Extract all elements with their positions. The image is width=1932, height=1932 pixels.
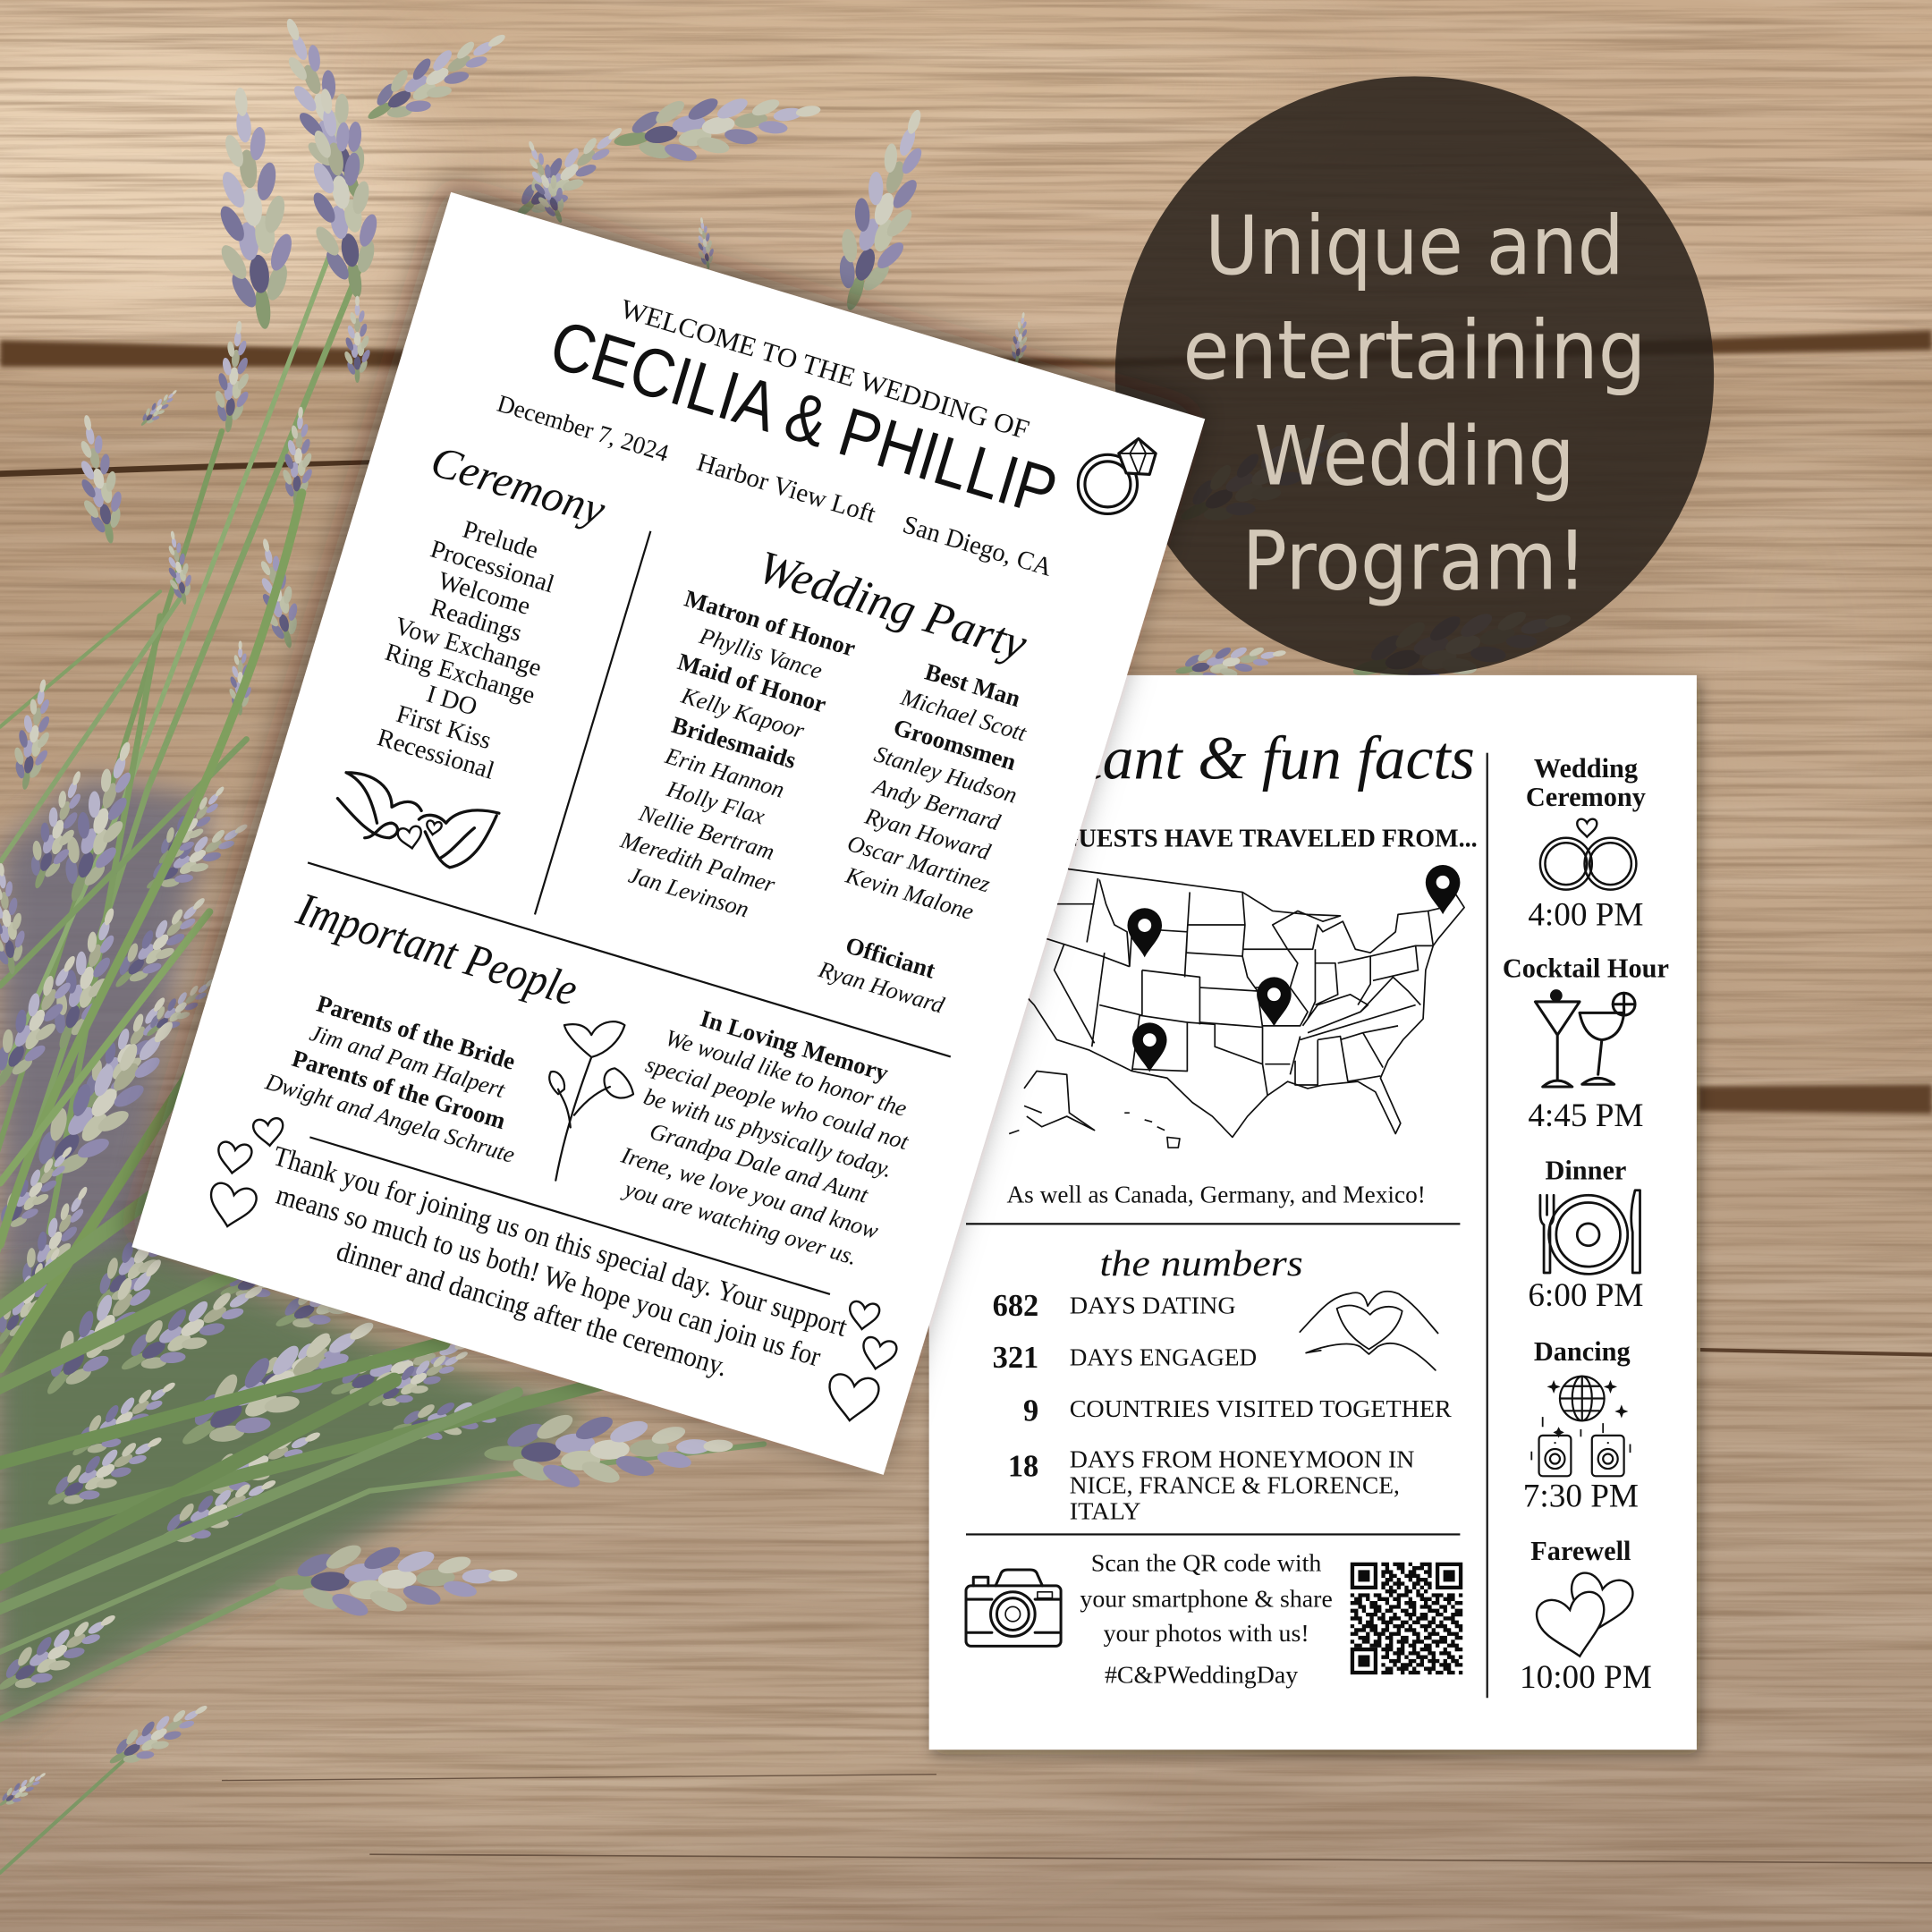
text: QR code instructions: your smartphone & share: [1080, 1584, 1333, 1612]
stats list: 9: [1023, 1394, 1038, 1428]
ceremony order list: First Kiss: [393, 700, 495, 755]
groom party list: Officiant: [843, 931, 938, 984]
groom party list: Andy Bernard: [869, 773, 1004, 836]
bridal party list: Kelly Kapoor: [678, 682, 808, 744]
stats list: DAYS DATING: [1070, 1291, 1236, 1318]
parents list: [262, 982, 544, 1168]
groom party list: [807, 651, 1047, 1021]
in loving memory: We would like to honor the: [663, 1024, 911, 1122]
text: QR code instructions: your photos with us!: [1104, 1619, 1309, 1647]
parents list: Jim and Pam Halpert: [307, 1020, 508, 1103]
schedule: wedding ceremony: 4:00 PM: [1528, 897, 1643, 934]
bridal party list: Maid of Honor: [674, 648, 829, 718]
ceremony order list: Processional: [428, 535, 557, 598]
lavender bundle: [0, 7, 1580, 1873]
event details: [495, 388, 1055, 582]
ceremony order list: Welcome: [435, 567, 533, 621]
panel: fun facts card: [929, 675, 1697, 1750]
icon: heart hands: [1300, 1292, 1438, 1370]
thank you message: means so much to us both! We hope you can join us for: [273, 1179, 825, 1373]
stats list: DAYS ENGAGED: [1070, 1343, 1257, 1370]
icon: hearts left: [205, 1118, 284, 1231]
stats list: NICE, FRANCE & FLORENCE,: [1070, 1471, 1400, 1499]
schedule: farewell: [1520, 1536, 1652, 1696]
in loving memory: special people who could not: [642, 1051, 912, 1155]
heading: important people: Important People: [291, 883, 583, 1016]
stats list: ITALY: [1070, 1497, 1141, 1525]
schedule: wedding ceremony: Ceremony: [1526, 782, 1646, 812]
groom party list: Ryan Howard: [861, 802, 995, 866]
schedule: wedding ceremony: Wedding: [1534, 753, 1638, 784]
schedule: cocktail hour: Cocktail Hour: [1503, 953, 1669, 983]
ceremony order list: I DO: [423, 681, 480, 722]
groom party list: Kevin Malone: [842, 861, 977, 925]
stats list: DAYS FROM HONEYMOON IN: [1070, 1445, 1415, 1473]
groom party list: Groomsmen: [891, 714, 1019, 775]
event details: December 7, 2024: [495, 389, 673, 467]
schedule: dancing: [1523, 1336, 1639, 1515]
in loving memory: [606, 994, 929, 1275]
icon: diamond ring: [1078, 438, 1156, 513]
program text content: [199, 253, 1135, 1419]
stats list: 682: [993, 1289, 1038, 1323]
title: couple names: CECILIA & PHILLIP: [542, 306, 1065, 531]
schedule: farewell: 10:00 PM: [1520, 1659, 1652, 1696]
stats list: 18: [1008, 1449, 1038, 1483]
QR code: [1351, 1563, 1462, 1674]
bridal party list: Bridesmaids: [669, 711, 800, 774]
bridal party list: Nellie Bertram: [635, 800, 777, 865]
panel: main program card: [131, 192, 1205, 1475]
bridal party list: Jan Levinson: [626, 862, 752, 922]
icon: camera: [966, 1570, 1061, 1646]
groom party list: Oscar Martinez: [844, 830, 993, 897]
ceremony order list: [358, 504, 579, 790]
badge: unique and entertaining wedding program: Unique and: [1205, 199, 1624, 293]
ceremony order list: Vow Exchange: [392, 612, 545, 682]
icon: dove hearts: [397, 820, 442, 851]
text: QR code instructions: [1080, 1548, 1333, 1689]
welcome line: WELCOME TO THE WEDDING OF: [617, 293, 1033, 445]
text: QR code instructions: Scan the QR code with: [1091, 1548, 1322, 1576]
heading: important and fun facts: Important & fun facts: [932, 724, 1475, 792]
heading: ceremony: Ceremony: [426, 436, 612, 535]
schedule: dinner: [1528, 1155, 1643, 1314]
in loving memory: you are watching over us.: [619, 1174, 860, 1270]
groom party list: Stanley Hudson: [871, 741, 1020, 809]
schedule: dinner: Dinner: [1545, 1155, 1626, 1185]
badge: unique and entertaining wedding program: [1115, 76, 1714, 675]
ceremony order list: Ring Exchange: [382, 639, 538, 710]
schedule: dancing: 7:30 PM: [1523, 1479, 1639, 1515]
bridal party list: Meredith Palmer: [617, 826, 779, 898]
schedule: wedding ceremony: [1526, 753, 1646, 934]
stats list: COUNTRIES VISITED TOGETHER: [1070, 1394, 1452, 1422]
schedule: dinner: 6:00 PM: [1528, 1277, 1643, 1314]
parents list: Dwight and Angela Schrute: [262, 1068, 518, 1168]
bridal party list: Matron of Honor: [682, 585, 859, 662]
ceremony order list: Prelude: [460, 516, 541, 564]
parents list: Parents of the Groom: [289, 1045, 509, 1134]
ceremony order list: Readings: [428, 594, 525, 648]
schedule: cocktail hour: [1503, 953, 1669, 1134]
ceremony order list: Recessional: [374, 724, 497, 785]
schedule: farewell: Farewell: [1530, 1536, 1631, 1566]
heading: guests have traveled from: OUR GUESTS HAVE TRAVELED FROM...: [996, 824, 1478, 852]
badge: unique and entertaining wedding program: Program!: [1242, 514, 1587, 608]
chart: map of the United States: [1002, 855, 1464, 1148]
icon: flower: [549, 1021, 633, 1181]
badge: unique and entertaining wedding program: Wedding: [1254, 410, 1575, 504]
groom party list: Ryan Howard: [815, 956, 948, 1019]
event details: San Diego, CA: [900, 510, 1055, 582]
icon: hearts right: [826, 1301, 898, 1424]
thank you message: Thank you for joining us on this special day. Your support: [270, 1140, 851, 1343]
text: also Canada, Germany, Mexico: As well as Canada, Germany, and Mexico!: [1006, 1180, 1426, 1208]
thank you message: dinner and dancing after the ceremony.: [333, 1235, 732, 1383]
stats list: [993, 1289, 1452, 1525]
event details: Harbor View Loft: [694, 448, 879, 529]
bridal party list: Phyllis Vance: [696, 623, 826, 684]
heading: the numbers: the numbers: [1099, 1242, 1303, 1284]
in loving memory: In Loving Memory: [698, 1004, 892, 1087]
text: QR code instructions: #C&PWeddingDay: [1105, 1661, 1298, 1689]
schedule: cocktail hour: 4:45 PM: [1528, 1097, 1643, 1134]
stats list: 321: [993, 1341, 1038, 1375]
in loving memory: Irene, we love you and know: [617, 1141, 882, 1244]
icon: doves: [337, 773, 499, 868]
bridal party list: [600, 585, 859, 930]
heading: wedding party: Wedding Party: [752, 541, 1033, 671]
badge: unique and entertaining wedding program: entertaining: [1182, 304, 1646, 398]
groom party list: Michael Scott: [897, 683, 1030, 747]
groom party list: Best Man: [922, 658, 1023, 712]
in loving memory: be with us physically today.: [640, 1083, 895, 1182]
bridal party list: Erin Hannon: [662, 742, 787, 803]
in loving memory: Grandpa Dale and Aunt: [647, 1118, 872, 1208]
parents list: Parents of the Bride: [314, 990, 519, 1075]
bridal party list: Holly Flax: [663, 775, 768, 830]
schedule: dancing: Dancing: [1534, 1336, 1631, 1367]
